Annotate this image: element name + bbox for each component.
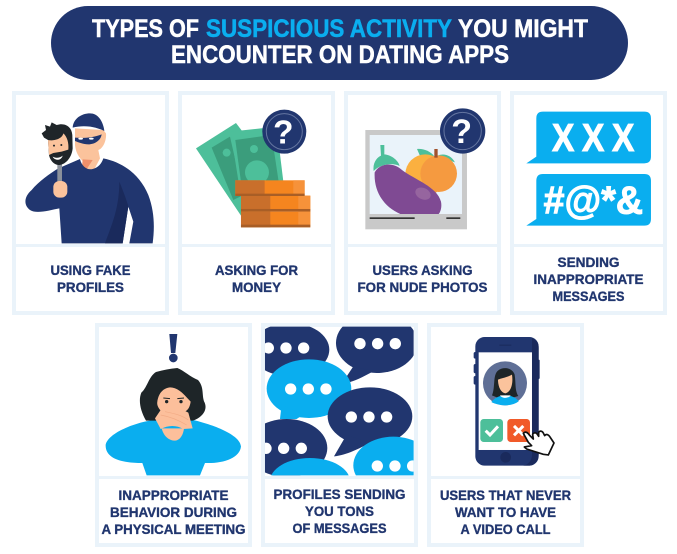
label bbox=[358, 262, 488, 295]
label: A VIDEO CALL bbox=[460, 521, 551, 537]
label: PROFILES SENDING bbox=[274, 486, 406, 502]
label: MONEY bbox=[232, 279, 282, 295]
panel: inappropriate behavior during a physical meeting bbox=[95, 323, 252, 547]
label: PROFILES bbox=[57, 279, 124, 295]
label: MESSAGES bbox=[552, 288, 624, 304]
title text bbox=[92, 15, 588, 69]
panel: users that never want to have a video call bbox=[427, 323, 584, 547]
label: WANT TO HAVE bbox=[455, 504, 556, 520]
label: OF MESSAGES bbox=[292, 520, 386, 536]
label: YOU TONS bbox=[305, 503, 374, 519]
icon: question badge: ? bbox=[273, 114, 293, 151]
label: BEHAVIOR DURING bbox=[110, 504, 237, 520]
title text: YOU MIGHT bbox=[458, 15, 588, 43]
panel: users asking for nude photos bbox=[344, 91, 501, 315]
panel: sending inappropriate messages bbox=[510, 91, 667, 315]
label bbox=[440, 487, 571, 537]
panel: using fake profiles bbox=[12, 91, 169, 315]
icon: overlapping chat bubbles bbox=[265, 326, 414, 476]
icon: thief holding a face mask bbox=[25, 113, 154, 243]
icon: chat bubbles with symbols: #@*& bbox=[544, 178, 643, 222]
icon: chat bubbles with symbols: X bbox=[582, 117, 604, 160]
icon: cash and coins bbox=[196, 110, 310, 227]
label: FOR NUDE PHOTOS bbox=[358, 279, 488, 295]
icon: woman covering her mouth with exclamation mark bbox=[106, 334, 241, 475]
label bbox=[534, 254, 644, 304]
label bbox=[215, 262, 298, 295]
title banner bbox=[51, 6, 628, 80]
title text: SUSPICIOUS ACTIVITY bbox=[206, 15, 452, 43]
icon: pointing hand bbox=[523, 431, 554, 455]
label: A PHYSICAL MEETING bbox=[102, 521, 246, 537]
label bbox=[50, 262, 130, 295]
label bbox=[274, 486, 406, 536]
icon: chat bubbles with symbols: X bbox=[552, 117, 574, 160]
icon: phone with call screen and hand bbox=[474, 337, 554, 466]
label: ASKING FOR bbox=[215, 262, 298, 278]
icon: question badge: ? bbox=[451, 113, 472, 151]
accept button bbox=[480, 419, 503, 442]
label: USING FAKE bbox=[50, 262, 130, 278]
icon: chat bubbles with symbols bbox=[526, 112, 651, 226]
decline button bbox=[507, 419, 530, 442]
label: USERS THAT NEVER bbox=[440, 487, 571, 503]
avatar bbox=[483, 361, 527, 405]
icon: photo of eggplant and peach bbox=[365, 108, 485, 229]
label: INAPPROPRIATE bbox=[118, 487, 228, 503]
title text: ENCOUNTER ON DATING APPS bbox=[171, 41, 509, 69]
panel: profiles sending you tons of messages bbox=[261, 323, 418, 547]
label: INAPPROPRIATE bbox=[534, 271, 644, 287]
panel: asking for money bbox=[178, 91, 335, 315]
label: SENDING bbox=[558, 254, 620, 270]
icon: chat bubbles with symbols: X bbox=[612, 117, 634, 160]
label: USERS ASKING bbox=[372, 262, 473, 278]
title text: TYPES OF bbox=[92, 15, 199, 43]
label bbox=[102, 487, 246, 537]
